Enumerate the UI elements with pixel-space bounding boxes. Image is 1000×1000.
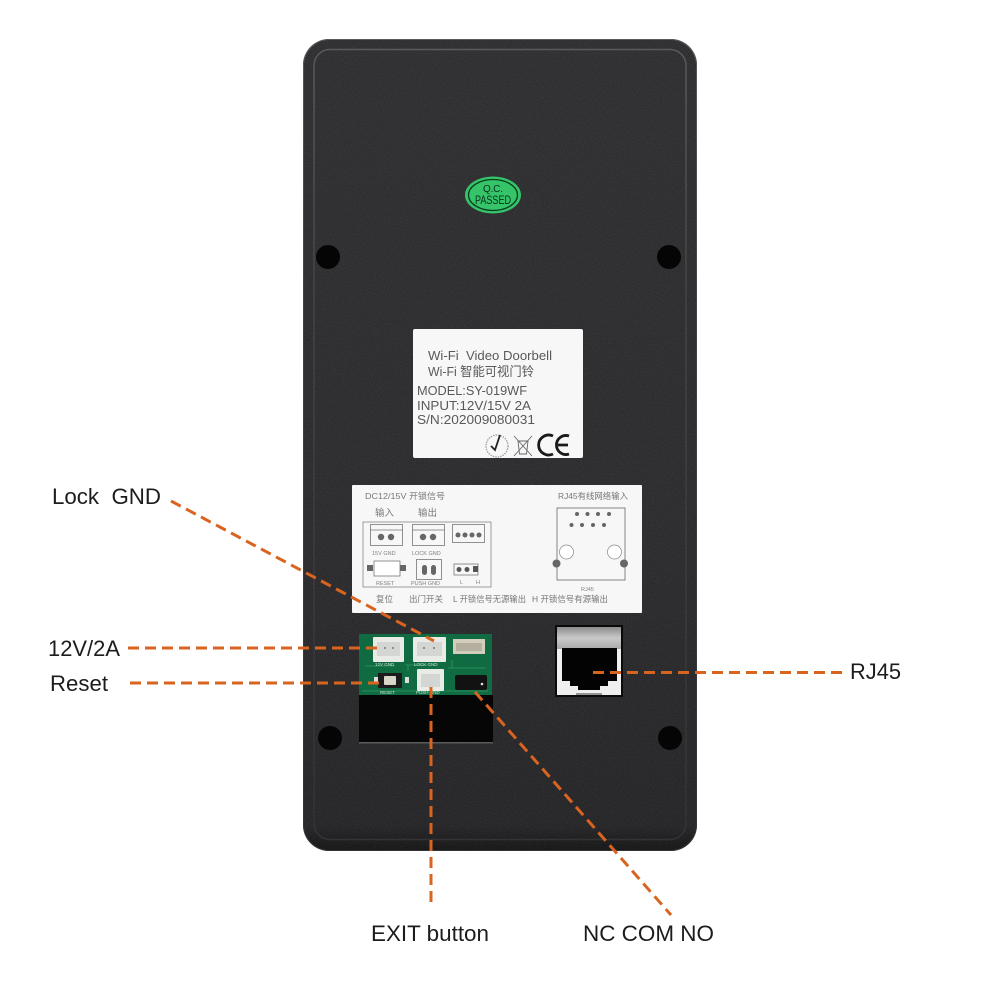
arrow: 12V/2A	[128, 646, 378, 650]
label: Lock GND: Lock GND	[52, 484, 161, 509]
wiring diagram label: L 开锁信号无源输出	[453, 594, 526, 604]
connector: lock	[413, 637, 446, 662]
wiring diagram label	[352, 485, 642, 613]
connector: relay	[453, 639, 485, 654]
jumper L H: H	[476, 580, 480, 586]
label: 12V/2A: 12V/2A	[48, 636, 120, 661]
jumper L H: L	[460, 580, 463, 586]
label: EXIT button: EXIT button	[371, 921, 489, 946]
RJ45 socket	[555, 625, 623, 697]
product label: INPUT:12V/15V 2A	[417, 398, 531, 413]
reset switch	[367, 561, 406, 587]
connector: PUSH GND: PUSH GND	[411, 581, 440, 587]
leader lines	[128, 501, 844, 915]
product label	[413, 329, 583, 458]
connector: PUSH GND	[411, 560, 442, 587]
jumper	[455, 675, 487, 690]
label: RJ45: RJ45	[850, 659, 901, 684]
product label: MODEL:SY-019WF	[417, 383, 527, 398]
icon: CE mark	[539, 435, 569, 455]
wiring diagram label: 出门开关	[409, 594, 444, 604]
screw holes	[316, 245, 682, 750]
wiring diagram label: 输入	[375, 507, 395, 519]
connector: LOCK GND: LOCK GND	[412, 551, 441, 557]
QC passed sticker	[465, 176, 521, 214]
terminal cutout with circuit board: RESET	[380, 690, 395, 695]
wiring diagram label: 输出	[418, 507, 437, 519]
RJ45 pinout: RJ45	[581, 587, 594, 593]
terminal cutout with circuit board: LOCK GND	[414, 662, 438, 667]
arrow: RJ45	[593, 671, 844, 674]
terminal cutout with circuit board: PUSH GND	[416, 690, 441, 695]
product label: Wi-Fi Video Doorbell	[428, 348, 552, 363]
wiring diagram label: RJ45有线网络输入	[558, 491, 628, 501]
wiring diagram label: DC12/15V 开锁信号	[365, 491, 445, 501]
QC passed sticker: PASSED	[475, 195, 511, 207]
jumper L H	[454, 564, 480, 586]
terminal cutout with circuit board: 12V GND	[375, 662, 395, 667]
arrow: Reset	[130, 682, 379, 684]
QC passed sticker: Q.C.	[483, 184, 503, 195]
connector: push	[417, 669, 444, 691]
reset button	[374, 673, 409, 688]
product label: S/N:202009080031	[417, 412, 535, 427]
doorbell rear housing	[303, 39, 697, 851]
arrow: NC COM NO	[475, 692, 671, 915]
connector: LOCK GND	[412, 524, 445, 557]
label: Reset: Reset	[50, 671, 108, 696]
connector: 15V GND	[370, 524, 403, 557]
arrow: Lock GND	[171, 501, 434, 641]
RJ45 pinout	[552, 508, 628, 593]
terminal cutout with circuit board	[359, 634, 493, 744]
arrow: EXIT button	[430, 687, 432, 904]
icon: certification check	[486, 435, 508, 457]
icon: WEEE bin	[514, 436, 532, 456]
connector: NC COM NO	[452, 524, 484, 542]
wiring diagram label: 复位	[376, 594, 394, 604]
reset switch: RESET	[376, 581, 395, 587]
wiring diagram label: H 开锁信号有源输出	[532, 594, 608, 604]
product label: Wi-Fi 智能可视门铃	[428, 364, 534, 379]
connector: 15V GND: 15V GND	[372, 551, 396, 557]
connector: 12V	[373, 637, 404, 662]
label: NC COM NO: NC COM NO	[583, 921, 714, 946]
